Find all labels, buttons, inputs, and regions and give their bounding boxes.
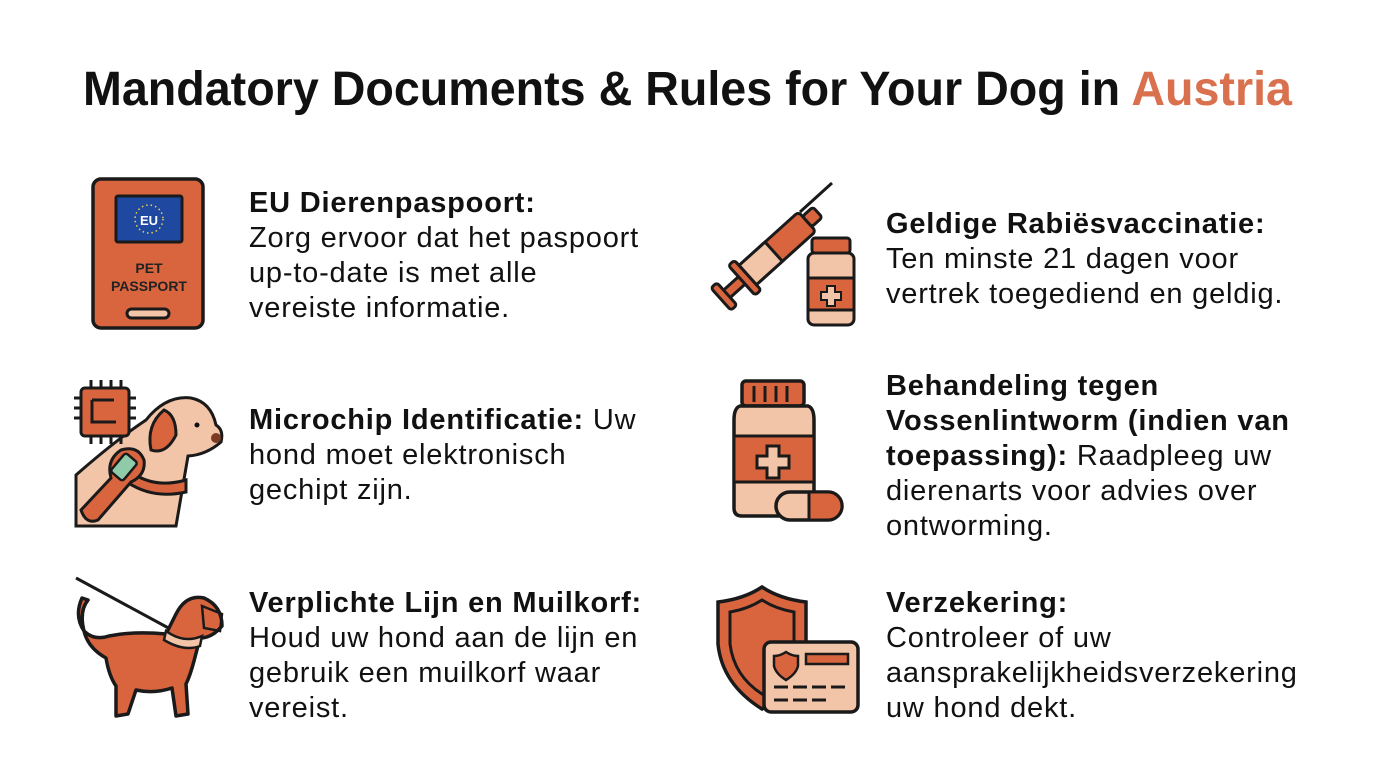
text: Microchip: gechipt zijn. [249, 474, 413, 506]
text: Lijn en Muilkorf [249, 587, 642, 724]
text: Rabiësvaccinatie: Ten minste 21 dagen voor [886, 243, 1239, 275]
title: Mandatory Documents & Rules for Your Dog in Austria [83, 63, 1292, 116]
text: EU Dierenpaspoort: up-to-date is met alle [249, 257, 537, 289]
text: Lijn en Muilkorf: gebruik een muilkorf waar [249, 657, 601, 689]
icon: pet passport: PASSPORT [111, 278, 187, 294]
text: Microchip [249, 404, 636, 506]
text: Vossenlintworm [886, 370, 1290, 542]
text: Verzekering [886, 587, 1298, 724]
text: Vossenlintworm: Vossenlintworm (indien van [886, 405, 1290, 437]
text: EU Dierenpaspoort: Zorg ervoor dat het paspoort [249, 222, 639, 254]
text: Rabiësvaccinatie: vertrek toegediend en geldig. [886, 278, 1283, 310]
icon: dog on leash with muzzle [75, 576, 224, 718]
text: Vossenlintworm: toepassing): Raadpleeg uw [886, 440, 1272, 472]
icon: pet passport [91, 177, 205, 330]
icon: pet passport: EU [140, 213, 158, 228]
text: EU Dierenpaspoort: vereiste informatie. [249, 292, 510, 324]
icon: pill bottle [732, 379, 844, 522]
text: Rabiësvaccinatie [886, 208, 1283, 310]
icon: syringe and vial [710, 182, 856, 326]
text: Lijn en Muilkorf: Verplichte Lijn en Muilkorf: [249, 587, 642, 619]
text: Verzekering: Controleer of uw [886, 622, 1112, 654]
text: Lijn en Muilkorf: Houd uw hond aan de lijn en [249, 622, 638, 654]
text: Vossenlintworm: ontworming. [886, 510, 1053, 542]
text: Microchip: hond moet elektronisch [249, 439, 566, 471]
text: Rabiësvaccinatie: Geldige Rabiësvaccinatie: [886, 208, 1265, 240]
text: EU Dierenpaspoort [249, 187, 639, 324]
icon: shield and insurance card [716, 584, 860, 714]
text: Verzekering: aansprakelijkheidsverzekering [886, 657, 1298, 689]
text: Vossenlintworm: Behandeling tegen [886, 370, 1159, 402]
icon: pet passport: PET [135, 260, 163, 276]
text: Verzekering: Verzekering: [886, 587, 1068, 619]
text: Lijn en Muilkorf: vereist. [249, 692, 349, 724]
text: EU Dierenpaspoort: EU Dierenpaspoort: [249, 187, 536, 219]
text: Microchip: Microchip Identificatie: Uw [249, 404, 636, 436]
text: Verzekering: uw hond dekt. [886, 692, 1077, 724]
text: Vossenlintworm: dierenarts voor advies over [886, 475, 1257, 507]
icon: microchip dog [74, 380, 224, 528]
